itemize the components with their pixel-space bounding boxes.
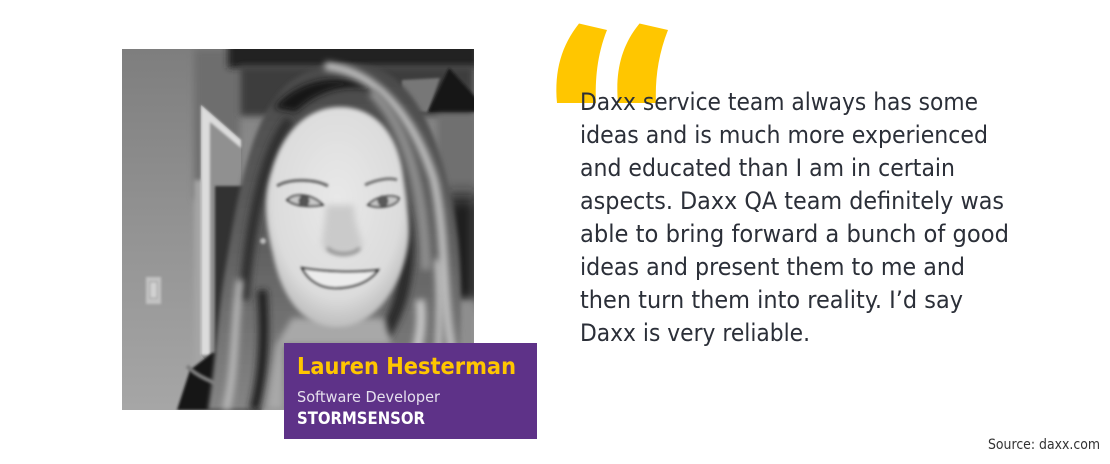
face [266,107,409,327]
job title: Software Developer [297,388,441,406]
quote text: ideas and present them to me and [580,253,965,281]
dark top [177,350,262,410]
quote text: ideas and is much more experienced [580,121,988,149]
quote text: able to bring forward a bunch of good [580,220,1009,248]
smile [302,268,378,288]
door frame [201,105,241,359]
eyes [287,195,399,207]
nose [322,205,363,253]
name card [284,343,537,439]
eyebrows [277,180,328,186]
quote text: Daxx is very reliable. [580,319,810,347]
source note: Source: daxx.com [988,437,1100,453]
photo: portrait of Lauren Hesterman [122,40,479,410]
quote text: aspects. Daxx QA team definitely was [580,187,1004,215]
icon: quotation mark [556,24,668,103]
quote text: and educated than I am in certain [580,154,955,182]
company: STORMSENSOR [297,409,425,428]
earring [260,238,266,244]
quote text: Daxx service team always has some [580,88,978,116]
name: Lauren Hesterman [297,354,516,380]
light switch [146,277,161,304]
hair [208,64,461,410]
quote text [580,88,1009,347]
neck and chest [266,318,392,410]
quote text: then turn them into reality. I’d say [580,286,963,314]
